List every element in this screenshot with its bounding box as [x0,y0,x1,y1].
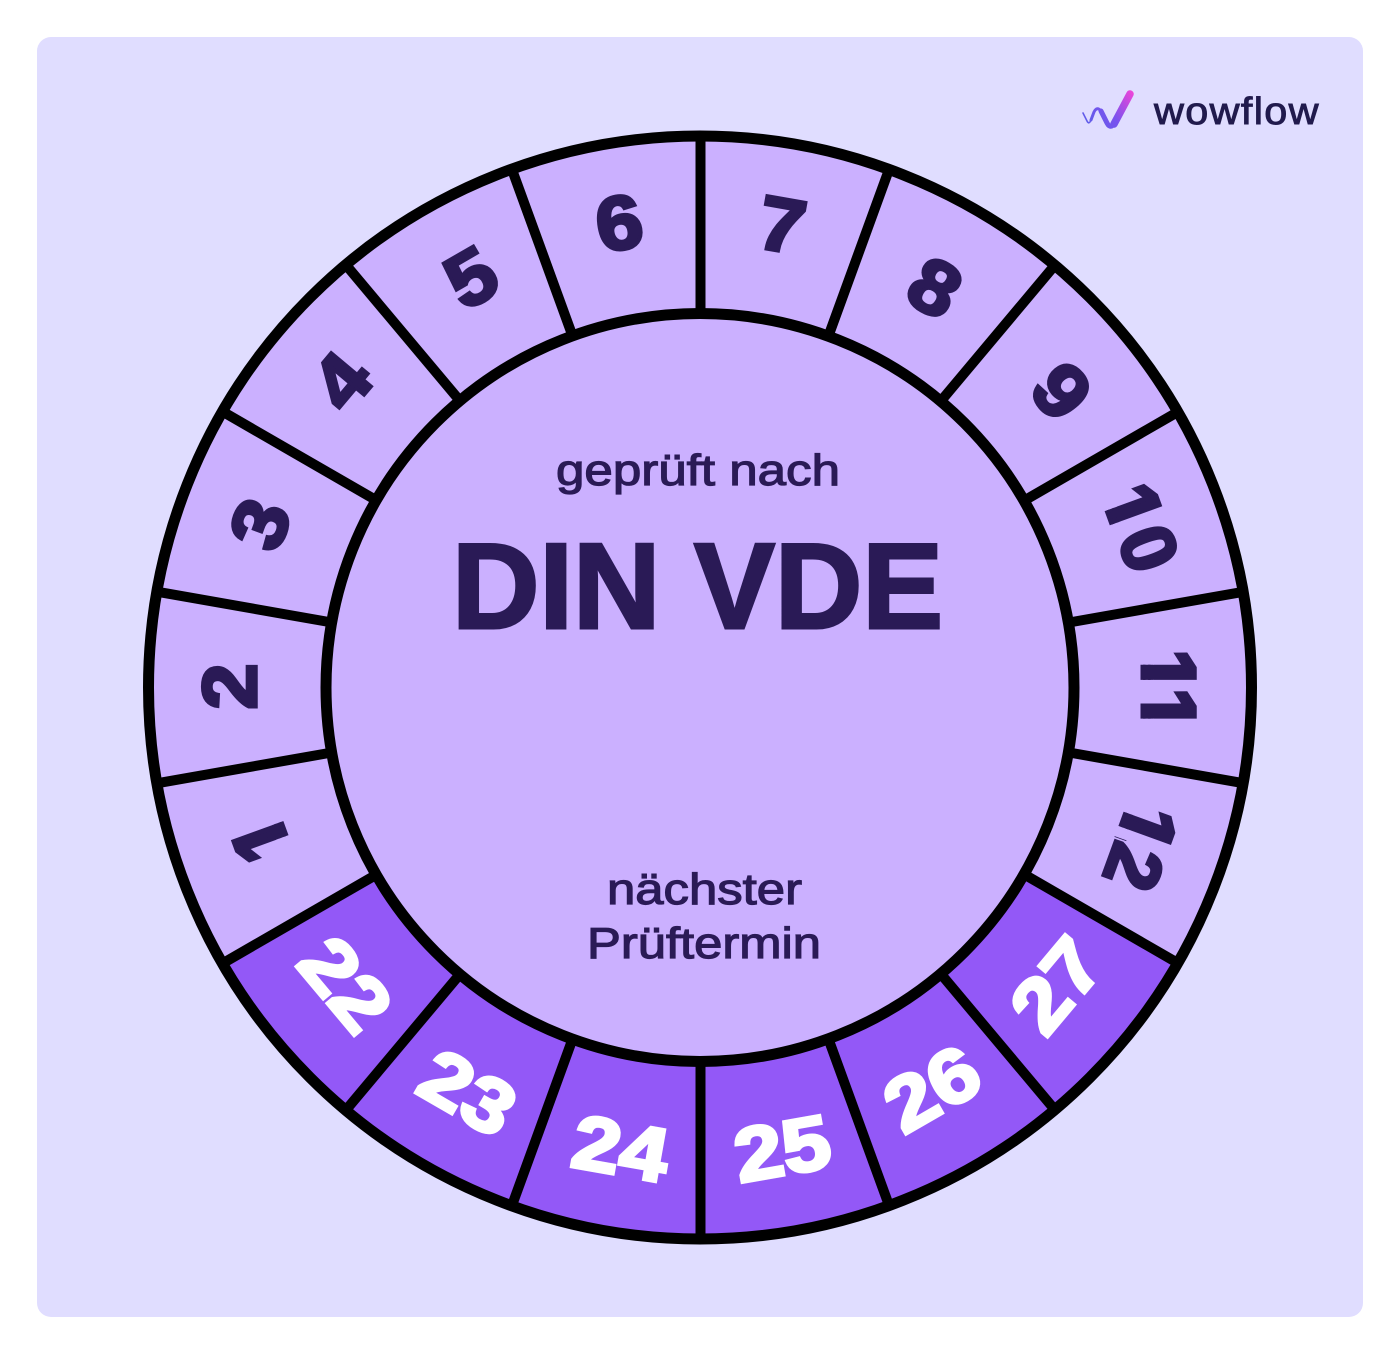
month numbers 1 to 12: 9 [1014,347,1108,437]
year numbers 22 to 27: 27 [994,922,1120,1050]
month numbers 1 to 12: 4 [295,337,389,427]
month numbers 1 to 12: 1 [1102,793,1194,860]
text: geprüft nach: geprüft nach [556,446,840,495]
month numbers 1 to 12: 3 [213,488,309,561]
month numbers 1 to 12: 0 [1101,514,1195,583]
segment dividers [157,136,1244,1240]
year numbers 22 to 27: 22 [282,921,408,1049]
month numbers 1 to 12: 8 [893,240,976,337]
year numbers 22 to 27: 24 [566,1099,675,1200]
month numbers 1 to 12: 2 [1086,833,1180,901]
month numbers 1 to 12: 1 [1127,650,1210,691]
month numbers 1 to 12: 1 [1087,473,1179,541]
month numbers 1 to 12: 5 [430,230,513,327]
year numbers 22 to 27: 26 [870,1028,995,1150]
icon: wave mark [1083,94,1130,126]
text: nächster Prüftermin: nächster [607,865,802,914]
month numbers 1 to 12: 6 [589,178,649,269]
text: nächster Prüftermin [587,865,821,968]
logo: wowflow [1083,91,1319,133]
highlighted year segments [222,874,1178,1239]
month numbers 1 to 12 [188,178,1210,901]
round inspection badge [148,136,1252,1240]
disc base [148,136,1252,1239]
logo wordmark: wowflow [1153,91,1319,133]
outer ring [148,136,1252,1239]
year numbers 22 to 27 [282,921,1120,1200]
month numbers 1 to 12: 7 [752,180,812,271]
month numbers 1 to 12: 1 [1127,689,1210,730]
month numbers 1 to 12: 2 [188,664,273,710]
text: nächster Prüftermin: Prüftermin [587,919,821,968]
year numbers 22 to 27: 23 [405,1032,530,1154]
year numbers 22 to 27: 25 [728,1099,837,1200]
heading: DIN VDE: DIN VDE [452,518,943,654]
inner circle [326,314,1074,1062]
month numbers 1 to 12: 1 [214,806,306,873]
